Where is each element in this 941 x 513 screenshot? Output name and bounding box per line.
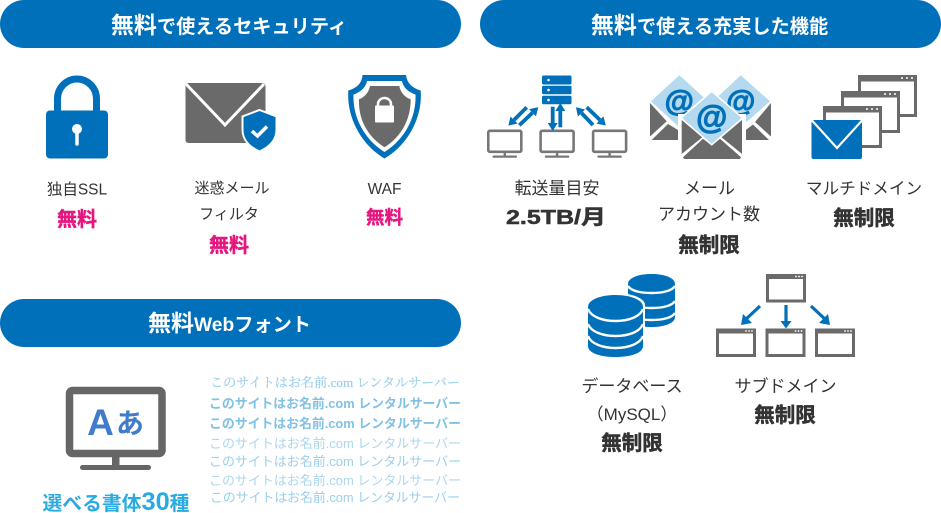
item: database: （MySQL） (587, 405, 677, 424)
item: mail accounts: 無制限 (678, 228, 740, 258)
icon: window tree with arrows (716, 274, 855, 356)
icon: monitor with Aa sample: あ (116, 408, 144, 439)
item: mail accounts: アカウント数 (658, 205, 760, 224)
icon: database cylinders (586, 274, 675, 359)
icon: stacked windows and envelope (812, 75, 917, 159)
item: spam mail filter: 迷惑メール (194, 180, 270, 197)
item: database (581, 274, 683, 456)
icon: server and clients (488, 76, 626, 158)
item: subdomain (716, 274, 855, 428)
item: database: 無制限 (601, 426, 663, 456)
item: mail accounts (650, 75, 771, 258)
font samples list: このサイトはお名前.com レンタルサーバー (210, 490, 460, 505)
item: database: データベース (581, 376, 683, 396)
item: multi domain: マルチドメイン (806, 179, 922, 198)
icon: envelope with shield (186, 83, 276, 152)
item: transfer volume: 転送量目安 (514, 179, 600, 198)
icon: three envelopes with at marks (650, 75, 771, 162)
item: subdomain: サブドメイン (734, 376, 836, 396)
item: transfer volume: 2.5TB/ 月 (506, 200, 606, 230)
header: free security: 無料で使えるセキュリティ (111, 12, 347, 38)
item: subdomain: 無制限 (754, 398, 816, 428)
item: multi domain: 無制限 (833, 201, 895, 231)
icon: three envelopes with at marks: @ (665, 85, 694, 118)
icon: shield with lock (348, 75, 421, 158)
item: WAF (348, 75, 421, 230)
item: multi domain (806, 75, 922, 231)
item: spam mail filter: 無料 (209, 229, 249, 258)
font samples list: このサイトはお名前.com レンタルサーバー (209, 454, 461, 469)
item: WAF: 無料 (366, 204, 403, 230)
item: WAF: WAF (368, 181, 401, 198)
font samples list: このサイトはお名前.com レンタルサーバー (209, 436, 461, 451)
item: transfer volume (488, 76, 626, 230)
font samples list: このサイトはお名前.com レンタルサーバー (209, 416, 461, 431)
icon: monitor with Aa sample: A (87, 402, 114, 443)
icon: monitor with Aa sample (70, 390, 162, 470)
header: free features: 無料で使える充実した機能 (591, 12, 828, 38)
item: dedicated SSL: 無料 (57, 203, 97, 232)
font samples list: このサイトはお名前.com レンタルサーバー (209, 396, 461, 411)
font samples list: このサイトはお名前.com レンタルサーバー (210, 375, 460, 390)
header: free web fonts: 無料Webフォント (148, 310, 311, 336)
header: free web fonts (0, 299, 461, 347)
item: dedicated SSL: 独自SSL (47, 180, 108, 198)
icon: padlock (46, 79, 108, 158)
icon: three envelopes with at marks: @ (696, 99, 727, 135)
font samples list (209, 375, 461, 505)
item: spam mail filter (186, 83, 276, 258)
header: free security (0, 0, 461, 48)
icon: three envelopes with at marks: @ (726, 85, 755, 118)
item: spam mail filter: フィルタ (199, 206, 259, 223)
header: free features (480, 0, 941, 48)
item: dedicated SSL (46, 79, 108, 232)
font samples list: このサイトはお名前.com レンタルサーバー (209, 473, 461, 488)
item: mail accounts: メール (684, 179, 735, 198)
item: selectable fonts (42, 390, 190, 513)
